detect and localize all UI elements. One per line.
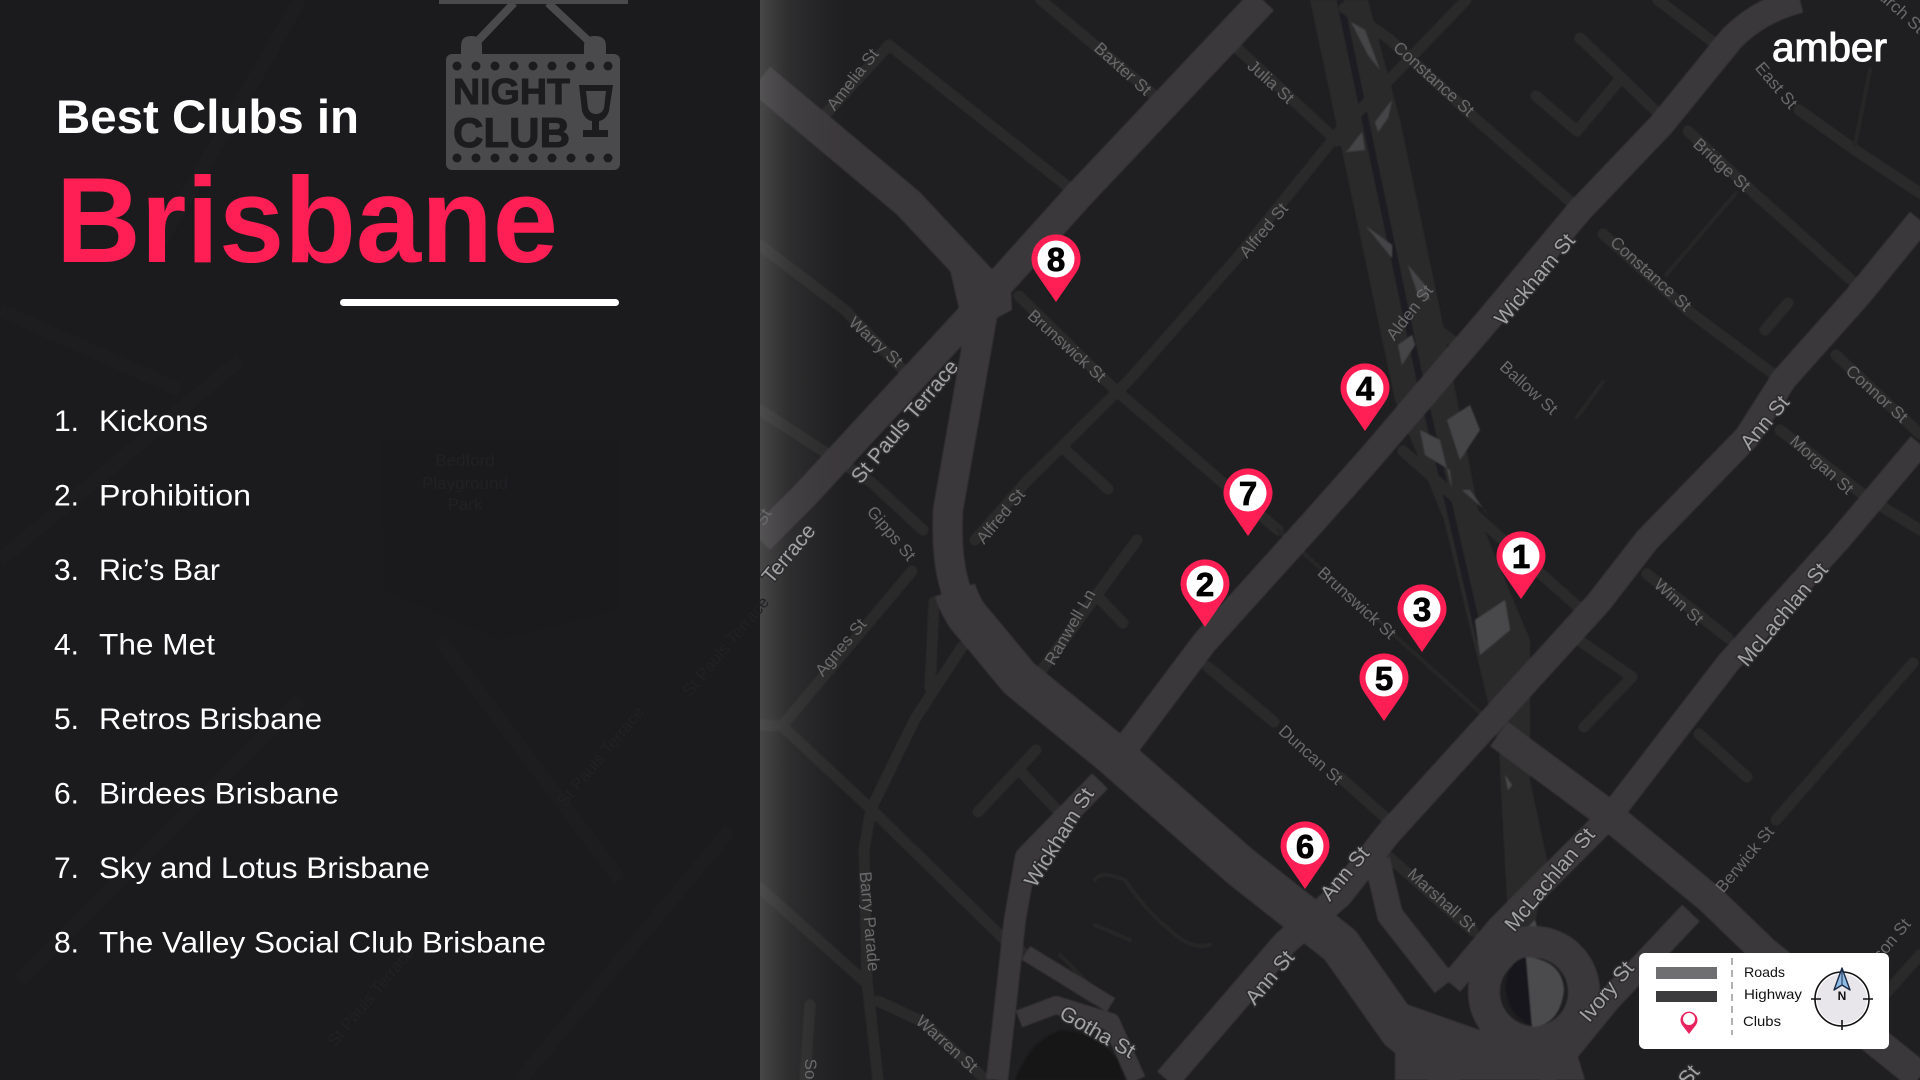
street labels: Constance St	[1389, 38, 1478, 120]
map pin 7	[1224, 468, 1272, 536]
ghost map texture: Park	[448, 495, 483, 514]
legend labels	[1743, 964, 1802, 1029]
street labels: Gipps St	[863, 502, 920, 565]
street labels: Ann St	[1736, 391, 1794, 454]
legend labels: Clubs	[1743, 1013, 1781, 1029]
street labels: Winn St	[1650, 575, 1707, 629]
title: Best Clubs in	[56, 90, 359, 143]
street labels: Ann St	[1316, 842, 1374, 905]
street labels: Ivory St	[1575, 957, 1639, 1026]
map pin 8	[1032, 234, 1080, 302]
street labels: Warren St	[912, 1011, 981, 1077]
map pin 6	[1280, 821, 1329, 889]
street labels: Constance St	[1606, 233, 1695, 315]
street labels: Amelia St	[823, 45, 883, 114]
map pin 4: 4	[1356, 370, 1375, 407]
ghost map texture: St Pauls Terrace	[554, 703, 648, 810]
street labels: Gotha St	[1056, 1002, 1139, 1063]
street labels: Marshall St	[1404, 864, 1480, 936]
club list: Kickons	[99, 405, 208, 438]
map pin 8: 8	[1047, 241, 1065, 278]
street labels: St	[751, 505, 776, 529]
street labels: Morgan St	[1786, 432, 1857, 498]
street labels: Ann St	[1241, 946, 1299, 1009]
club list	[54, 405, 546, 960]
panel: left sidebar	[0, 0, 773, 1080]
title	[56, 90, 558, 288]
club list: Retros Brisbane	[99, 703, 322, 736]
edge fade	[760, 0, 845, 1080]
street labels	[751, 0, 1920, 1080]
club list: 4.	[54, 628, 79, 662]
street labels: Alden St	[1382, 281, 1437, 344]
map pin 1	[1496, 531, 1546, 599]
street labels: Julia St	[1244, 56, 1298, 108]
street labels: McLachlan St	[1733, 559, 1833, 671]
ghost map texture: Playground	[422, 474, 508, 493]
street labels: Warry St	[845, 313, 907, 371]
icon: compass	[1811, 968, 1873, 1030]
street labels: Ballow St	[1496, 357, 1562, 419]
street labels: Bridge St	[1689, 134, 1754, 196]
legend	[1639, 953, 1889, 1049]
club list: 1.	[54, 405, 79, 438]
icon: compass: N	[1838, 989, 1846, 1003]
club list: Sky and Lotus Brisbane	[99, 852, 430, 885]
legend labels: Highway	[1744, 986, 1802, 1002]
club list: Ric’s Bar	[99, 554, 220, 587]
street labels: Wickham St	[1020, 784, 1099, 891]
club list: The Met	[99, 628, 216, 662]
club list: Prohibition	[99, 480, 251, 512]
street labels: son St	[1869, 915, 1915, 964]
street labels: Ranwell Ln	[1041, 586, 1099, 668]
map pin 6: 6	[1296, 828, 1314, 865]
major roads	[760, 0, 1920, 1080]
map pin 1: 1	[1512, 538, 1530, 575]
street labels: Berwick St	[1712, 822, 1778, 896]
minor roads	[760, 0, 1920, 1080]
street labels: Duncan St	[1275, 721, 1347, 789]
street labels: Terrace	[758, 520, 820, 588]
legend swatch: highway	[1656, 991, 1717, 1002]
rail corridor	[1310, 0, 1547, 960]
map pin 2	[1180, 559, 1230, 627]
street labels: Alfred St	[1236, 199, 1292, 262]
street labels: Brunswick St	[1024, 306, 1110, 386]
map pin 5: 5	[1375, 660, 1393, 697]
street labels: St Pauls Terrace	[847, 356, 963, 488]
club list: 8.	[54, 926, 79, 960]
icon: night club sign	[439, 0, 628, 170]
legend icon: club pin	[1680, 1012, 1698, 1034]
legend swatch: roads	[1656, 967, 1717, 979]
club list: 5.	[54, 703, 79, 736]
club list: 7.	[54, 852, 79, 885]
roundabout centre	[1506, 957, 1564, 1027]
title: Brisbane	[56, 152, 558, 288]
ghost map texture	[0, 0, 773, 1080]
panel: street map	[751, 0, 1920, 1080]
street labels: Wickham St	[1490, 229, 1580, 330]
map pin 2: 2	[1196, 566, 1214, 603]
map pin 4	[1340, 363, 1389, 431]
street labels: East St	[1751, 58, 1801, 113]
brand logo: amber: amber	[1772, 26, 1887, 70]
ghost map texture: St Pauls Terrace	[324, 943, 418, 1050]
road network	[760, 0, 1920, 1080]
street labels: Alfred St	[973, 485, 1029, 548]
street labels: Connor St	[1842, 361, 1912, 427]
street labels: So	[801, 1059, 820, 1079]
street labels: Agnes St	[811, 615, 870, 680]
club list: The Valley Social Club Brisbane	[99, 926, 546, 960]
street labels: Brunswick St	[1314, 563, 1400, 643]
club list: 6.	[54, 778, 79, 810]
club list: 2.	[54, 480, 79, 512]
pond at Gotha St	[1015, 1030, 1125, 1080]
map pin 7: 7	[1239, 475, 1257, 512]
map pin 3: 3	[1413, 591, 1431, 628]
street labels: Baxter St	[1090, 38, 1155, 100]
map pin 5	[1360, 653, 1408, 721]
street labels: Barry Parade	[856, 871, 883, 972]
icon: night club sign: CLUB	[453, 109, 570, 156]
club list: Birdees Brisbane	[99, 778, 339, 810]
title underline	[340, 299, 619, 306]
ghost map texture: St Pauls Terrace	[679, 593, 773, 700]
icon: night club sign: NIGHT	[453, 71, 570, 112]
legend labels: Roads	[1744, 964, 1785, 980]
map pin 3	[1398, 584, 1446, 652]
club list: 3.	[54, 554, 79, 587]
ghost map texture: Bedford	[435, 451, 495, 470]
street labels: McLachlan St	[1500, 824, 1600, 936]
